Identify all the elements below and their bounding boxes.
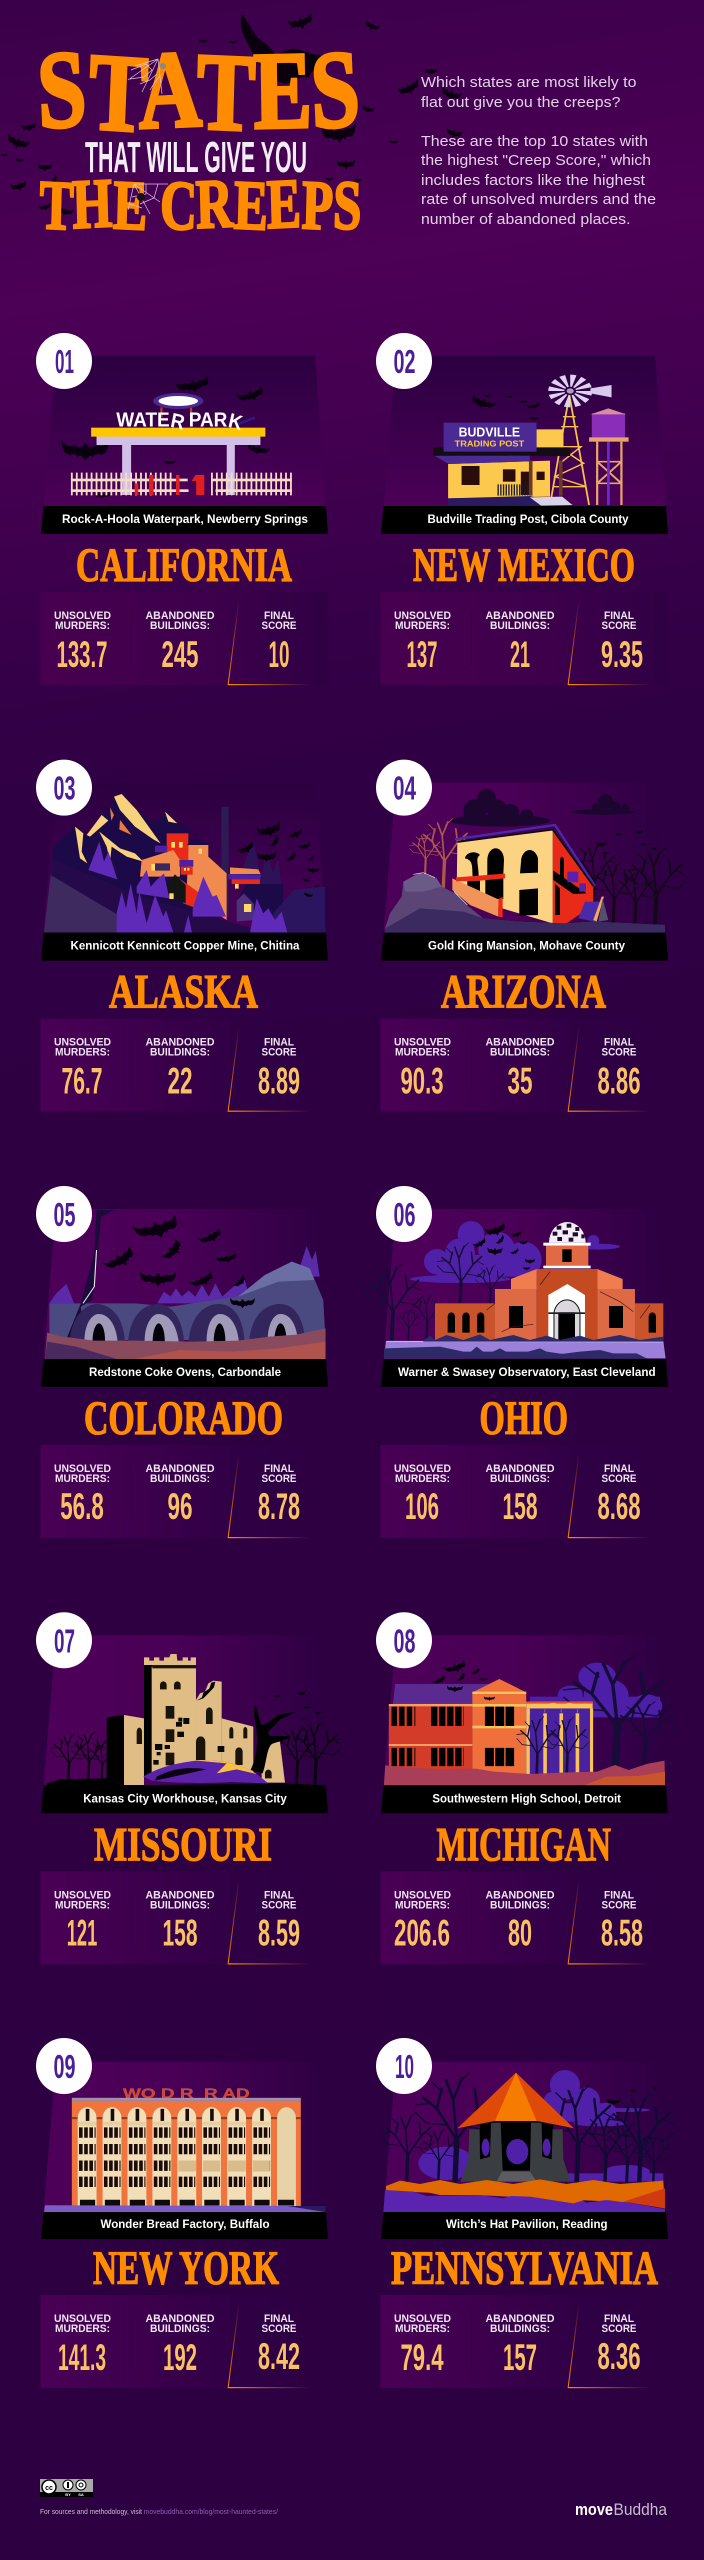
stats panel <box>40 1019 328 1112</box>
state name: ALASKA <box>109 966 258 1019</box>
illustration: Budville trading post: BUDVILLE <box>459 426 520 440</box>
caption: Kennicott Kennicott Copper Mine, Chitina <box>70 941 300 953</box>
illustration: Wonder Bread factory: WO D R R AD <box>123 2087 250 2101</box>
stats panel: UNSOLVED <box>54 610 111 622</box>
caption: Warner & Swasey Observatory, East Cleveland <box>398 1367 656 1379</box>
caption: Southwestern High School, Detroit <box>432 1793 621 1805</box>
rank badge <box>376 1186 432 1242</box>
rank badge: 01 <box>55 343 74 380</box>
rank badge <box>376 2038 432 2094</box>
icon: creative commons badge: SA <box>78 2492 84 2497</box>
rank badge <box>376 760 432 816</box>
rank badge: 05 <box>54 1196 76 1233</box>
stats panel: MURDERS: <box>395 1047 450 1059</box>
stats panel <box>40 592 328 685</box>
caption bar <box>41 1359 328 1387</box>
stats panel: ABANDONED <box>486 610 555 622</box>
stats panel: ABANDONED <box>486 2313 555 2325</box>
icon: creative commons badge: cc <box>45 2485 53 2492</box>
title: STATES <box>34 28 362 155</box>
stats panel: 206.6 <box>394 1912 450 1953</box>
logo: moveBuddha: Buddha <box>614 2500 667 2519</box>
sources note: For sources and methodology, visit <box>40 2507 143 2516</box>
illustration: Witch's Hat pavilion <box>382 2070 675 2212</box>
stats panel: FINAL <box>264 610 294 622</box>
stats panel: SCORE <box>602 1899 636 1911</box>
intro text: includes factors like the highest <box>421 172 646 189</box>
stats panel: MURDERS: <box>395 1899 450 1911</box>
stats panel: 10 <box>268 634 290 675</box>
illustration: Southwestern High School <box>384 1656 677 1785</box>
stats panel: UNSOLVED <box>54 2313 111 2325</box>
caption bar <box>381 2212 668 2239</box>
stats panel: ABANDONED <box>486 1889 555 1901</box>
card 04 Arizona <box>376 760 685 1112</box>
stats panel: 192 <box>163 2337 197 2378</box>
caption bar <box>41 2212 328 2239</box>
stats panel: MURDERS: <box>395 1473 450 1485</box>
rank badge <box>36 1186 92 1242</box>
stats panel: BUILDINGS: <box>490 1899 550 1911</box>
stats panel: FINAL <box>264 2313 294 2325</box>
stats panel: BUILDINGS: <box>150 620 210 632</box>
intro text: Which states are most likely to <box>421 74 636 91</box>
caption bar <box>381 933 668 961</box>
stats panel: BUILDINGS: <box>150 1047 210 1059</box>
stats panel: UNSOLVED <box>54 1889 111 1901</box>
stats panel: BUILDINGS: <box>150 1899 210 1911</box>
rank badge <box>376 333 432 389</box>
intro text <box>421 74 656 228</box>
illustration: water park gate: WATER PARK <box>116 409 247 434</box>
stats panel: ABANDONED <box>146 2313 215 2325</box>
caption: Budville Trading Post, Cibola County <box>428 514 629 526</box>
rank badge: 08 <box>394 1622 416 1659</box>
logo: moveBuddha <box>575 2500 667 2519</box>
title <box>34 28 363 245</box>
card 05 Colorado <box>36 1186 328 1538</box>
stats panel: UNSOLVED <box>394 1889 451 1901</box>
stats panel: BUILDINGS: <box>490 620 550 632</box>
rank badge: 06 <box>394 1196 416 1233</box>
stats panel: 8.59 <box>258 1912 300 1953</box>
stats panel: SCORE <box>262 1899 296 1911</box>
illustration: Kennicott copper mine <box>44 794 325 932</box>
stats panel: FINAL <box>264 1463 294 1475</box>
card 10 Pennsylvania <box>376 2038 675 2388</box>
stats panel: 133.7 <box>56 634 108 675</box>
title: THAT WILL GIVE YOU <box>85 133 307 182</box>
state name: NEW YORK <box>93 2242 279 2295</box>
stats panel <box>380 2295 668 2388</box>
state name: COLORADO <box>84 1392 283 1445</box>
card 08 Michigan <box>376 1612 677 1964</box>
intro text: These are the top 10 states with <box>421 133 648 150</box>
state name: OHIO <box>480 1392 568 1445</box>
image panel <box>384 2062 666 2212</box>
stats panel: BUILDINGS: <box>490 2323 550 2335</box>
stats panel: UNSOLVED <box>394 1037 451 1049</box>
stats panel: 137 <box>406 634 438 675</box>
stats panel: 8.78 <box>258 1486 300 1527</box>
stats panel: MURDERS: <box>55 1473 110 1485</box>
image panel <box>44 1209 326 1359</box>
stats panel: 141.3 <box>58 2337 106 2378</box>
stats panel: SCORE <box>262 2323 296 2335</box>
rank badge <box>376 1612 432 1668</box>
illustration: Wonder Bread factory <box>44 2087 326 2212</box>
stats panel <box>40 1445 328 1538</box>
stats panel: FINAL <box>264 1889 294 1901</box>
rank badge <box>36 2038 92 2094</box>
stats panel: MURDERS: <box>395 620 450 632</box>
stats panel: 158 <box>162 1912 198 1953</box>
stats panel: MURDERS: <box>55 1899 110 1911</box>
stats panel: 76.7 <box>62 1061 102 1102</box>
stats panel: 56.8 <box>60 1486 104 1527</box>
stats panel: ABANDONED <box>146 1463 215 1475</box>
card 03 Alaska <box>36 760 328 1112</box>
image panel <box>44 1635 326 1785</box>
illustration: Budville trading post: TRADING POST <box>455 440 525 449</box>
caption bar <box>381 1785 668 1813</box>
stats panel: UNSOLVED <box>394 2313 451 2325</box>
stats panel: 158 <box>502 1486 538 1527</box>
card 09 New York <box>36 2038 328 2388</box>
stats panel: 96 <box>168 1486 192 1527</box>
image panel <box>44 783 326 933</box>
illustration: Kansas City workhouse <box>44 1654 341 1789</box>
stats panel: BUILDINGS: <box>150 2323 210 2335</box>
caption: Rock-A-Hoola Waterpark, Newberry Springs <box>62 514 308 526</box>
image panel <box>384 1209 666 1359</box>
stats panel: 8.36 <box>598 2336 640 2377</box>
image panel <box>384 356 666 506</box>
caption bar <box>381 506 668 534</box>
header bats <box>1 12 463 218</box>
intro text: rate of unsolved murders and the <box>421 191 656 208</box>
stats panel: 8.58 <box>601 1912 643 1953</box>
stats panel: UNSOLVED <box>394 1463 451 1475</box>
intro text: flat out give you the creeps? <box>421 94 620 111</box>
stats panel: SCORE <box>602 1473 636 1485</box>
sources note: movebuddha.com/blog/most-haunted-states/ <box>144 2507 279 2516</box>
rank badge: 09 <box>54 2048 76 2085</box>
stats panel: 245 <box>162 634 198 675</box>
card 01 California <box>36 333 328 685</box>
stats panel: BUILDINGS: <box>150 1473 210 1485</box>
stats panel <box>380 1871 668 1964</box>
icon: creative commons badge: BY <box>65 2492 71 2497</box>
stats panel: MURDERS: <box>55 2323 110 2335</box>
stats panel <box>40 1871 328 1964</box>
stats panel: 79.4 <box>400 2337 444 2378</box>
icon: creative commons badge <box>40 2479 93 2497</box>
state name: MICHIGAN <box>436 1818 611 1871</box>
intro text: number of abandoned places. <box>421 211 630 228</box>
stats panel <box>40 2295 328 2388</box>
stats panel <box>380 1019 668 1112</box>
stats panel: 106 <box>405 1486 439 1527</box>
stats panel: 21 <box>510 634 530 675</box>
stats panel: 9.35 <box>601 634 643 675</box>
card 06 Ohio <box>364 1186 668 1538</box>
rank badge: 04 <box>393 770 416 807</box>
title: THE CREEPS <box>38 166 363 245</box>
stats panel: 22 <box>168 1061 192 1102</box>
stats panel: 8.42 <box>258 2336 300 2377</box>
illustration: Warner and Swasey observatory <box>364 1221 666 1358</box>
illustration: Redstone coke ovens <box>45 1210 326 1359</box>
rank badge <box>36 1612 92 1668</box>
stats panel: SCORE <box>602 620 636 632</box>
stats panel: UNSOLVED <box>394 610 451 622</box>
illustration: water park gate <box>62 375 292 498</box>
caption: Wonder Bread Factory, Buffalo <box>100 2219 270 2231</box>
caption: Witch’s Hat Pavilion, Reading <box>446 2219 608 2231</box>
rank badge <box>36 760 92 816</box>
image panel <box>44 356 326 506</box>
stats panel: 8.68 <box>598 1486 640 1527</box>
stats panel: FINAL <box>604 1463 634 1475</box>
rank badge: 07 <box>54 1622 75 1659</box>
illustration: Budville trading post <box>433 381 629 506</box>
stats panel: FINAL <box>604 1889 634 1901</box>
rank badge <box>36 333 92 389</box>
rank badge: 03 <box>54 770 76 807</box>
stats panel: 8.86 <box>598 1061 640 1102</box>
image panel <box>384 1635 666 1785</box>
state name: MISSOURI <box>94 1818 272 1871</box>
spider web top <box>128 59 166 94</box>
stats panel: 8.89 <box>258 1061 300 1102</box>
stats panel: SCORE <box>602 1047 636 1059</box>
illustration: Gold King mansion <box>385 789 685 932</box>
card 02 New Mexico <box>376 333 668 685</box>
stats panel: MURDERS: <box>55 1047 110 1059</box>
stats panel <box>380 592 668 685</box>
stats panel: MURDERS: <box>55 620 110 632</box>
caption: Kansas City Workhouse, Kansas City <box>83 1793 287 1805</box>
stats panel: ABANDONED <box>146 610 215 622</box>
stats panel <box>380 1445 668 1538</box>
stats panel: 157 <box>503 2337 537 2378</box>
stats panel: 35 <box>508 1061 532 1102</box>
stats panel: 121 <box>67 1912 97 1953</box>
caption bar <box>41 506 328 534</box>
state name: CALIFORNIA <box>76 539 292 592</box>
stats panel: SCORE <box>262 620 296 632</box>
caption: Redstone Coke Ovens, Carbondale <box>89 1367 281 1379</box>
stats panel: SCORE <box>602 2323 636 2335</box>
stats panel: ABANDONED <box>486 1463 555 1475</box>
card 07 Missouri <box>36 1612 341 1964</box>
stats panel: BUILDINGS: <box>490 1473 550 1485</box>
stats panel: 90.3 <box>400 1061 444 1102</box>
stats panel: 80 <box>508 1912 532 1953</box>
stats panel: MURDERS: <box>395 2323 450 2335</box>
logo: moveBuddha: move <box>575 2500 613 2519</box>
stats panel: SCORE <box>262 1473 296 1485</box>
stats panel: FINAL <box>604 1037 634 1049</box>
stats panel: ABANDONED <box>486 1037 555 1049</box>
rank badge: 10 <box>395 2048 414 2085</box>
caption bar <box>381 1359 668 1387</box>
caption bar <box>41 933 328 961</box>
image panel <box>44 2062 326 2212</box>
stats panel: UNSOLVED <box>54 1037 111 1049</box>
image panel <box>384 783 666 933</box>
stats panel: SCORE <box>262 1047 296 1059</box>
stats panel: ABANDONED <box>146 1037 215 1049</box>
stats panel: ABANDONED <box>146 1889 215 1901</box>
rank badge: 02 <box>394 343 416 380</box>
stats panel: FINAL <box>604 610 634 622</box>
intro text: the highest "Creep Score," which <box>421 152 651 169</box>
spider web bottom <box>128 184 168 214</box>
stats panel: FINAL <box>264 1037 294 1049</box>
state name: ARIZONA <box>441 966 606 1019</box>
stats panel: FINAL <box>604 2313 634 2325</box>
stats panel: BUILDINGS: <box>490 1047 550 1059</box>
stats panel: UNSOLVED <box>54 1463 111 1475</box>
caption: Gold King Mansion, Mohave County <box>428 941 626 953</box>
caption bar <box>41 1785 328 1813</box>
